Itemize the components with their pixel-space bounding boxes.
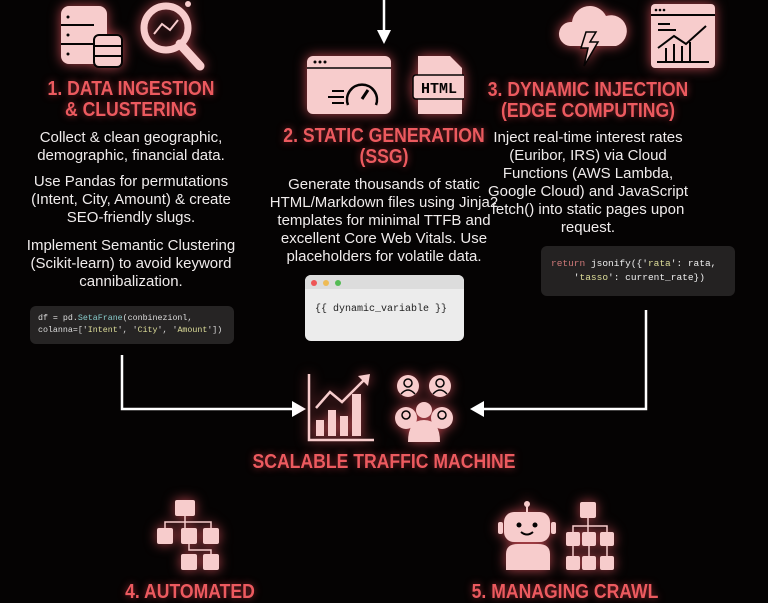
text: 1: SEO-friendly slugs. Implement Semantic Clustering [27, 209, 235, 254]
code box 3: return jsonify({'rata': rata, [551, 258, 716, 269]
code box 2: {{ dynamic_variable }} [315, 304, 447, 315]
text: 2 [270, 176, 498, 265]
heading: 1 [46, 76, 218, 121]
text: 1: (Scikit-learn) to avoid keyword [31, 255, 231, 272]
heading: scalable traffic machine: SCALABLE TRAFFIC MACHINE [252, 451, 516, 473]
code box 2 [305, 275, 464, 341]
heading: 2: 2. STATIC GENERATION [283, 125, 485, 147]
text: 3: (Euribor, IRS) via Cloud [509, 147, 667, 164]
heading: 3: (EDGE COMPUTING) [501, 100, 675, 122]
text: 3: Google Cloud) and JavaScript [488, 183, 688, 200]
code box 3 [541, 246, 735, 296]
text: 3: request. [561, 219, 615, 236]
icon: browser gauge and html file [298, 46, 474, 124]
heading: 3: 3. DYNAMIC INJECTION [488, 79, 688, 101]
text: 1: Collect & clean geographic, [40, 129, 222, 146]
text: 3 [488, 129, 688, 236]
code box 1: colanna=['Intent', 'City', 'Amount']) [38, 326, 222, 335]
arrow: left flow into center [120, 355, 306, 417]
code box 3: 'tasso': current_rate}) [574, 272, 705, 283]
code box 1: df = pd.SetaFrane(conbinezionl, [38, 314, 192, 323]
heading: 5: 5. MANAGING CRAWL [472, 581, 658, 603]
icon: hierarchy [148, 491, 228, 579]
text: 1: (Intent, City, Amount) & create [31, 191, 231, 208]
heading: 1: & CLUSTERING [65, 99, 197, 121]
text: 3: Inject real-time interest rates [493, 129, 683, 146]
text: 1 [27, 129, 235, 290]
text: 1: demographic, financial data. Use Pandas for permutations [34, 147, 228, 190]
code box 1 [30, 306, 234, 344]
text: 2: placeholders for volatile data. [286, 248, 482, 265]
icon: browser gauge and html file: HTML [421, 81, 457, 98]
arrow: top into static generation [377, 0, 391, 44]
icon: traffic chart and people [300, 367, 461, 452]
heading: 2 [280, 124, 488, 169]
icon: cloud and chart browser [550, 0, 724, 78]
text: 2: templates for minimal TTFB and [277, 212, 491, 229]
text: 2: HTML/Markdown files using Jinja2 [270, 194, 498, 211]
heading: 3 [486, 78, 692, 124]
heading: 4: 4. AUTOMATED [125, 581, 255, 603]
text: 3: Functions (AWS Lambda, [503, 165, 673, 182]
heading: 1: 1. DATA INGESTION [48, 78, 214, 100]
arrow: right flow into center [470, 310, 648, 417]
icon: robot and sitemap [490, 493, 622, 580]
text: 2: Generate thousands of static [288, 176, 480, 193]
text: 1: cannibalization. [79, 273, 183, 290]
heading: 2: (SSG) [360, 146, 408, 168]
text: 2: excellent Core Web Vitals. Use [281, 230, 487, 247]
text: 3: fetch() into static pages upon [492, 201, 684, 218]
icon: database and magnifier [52, 0, 212, 78]
